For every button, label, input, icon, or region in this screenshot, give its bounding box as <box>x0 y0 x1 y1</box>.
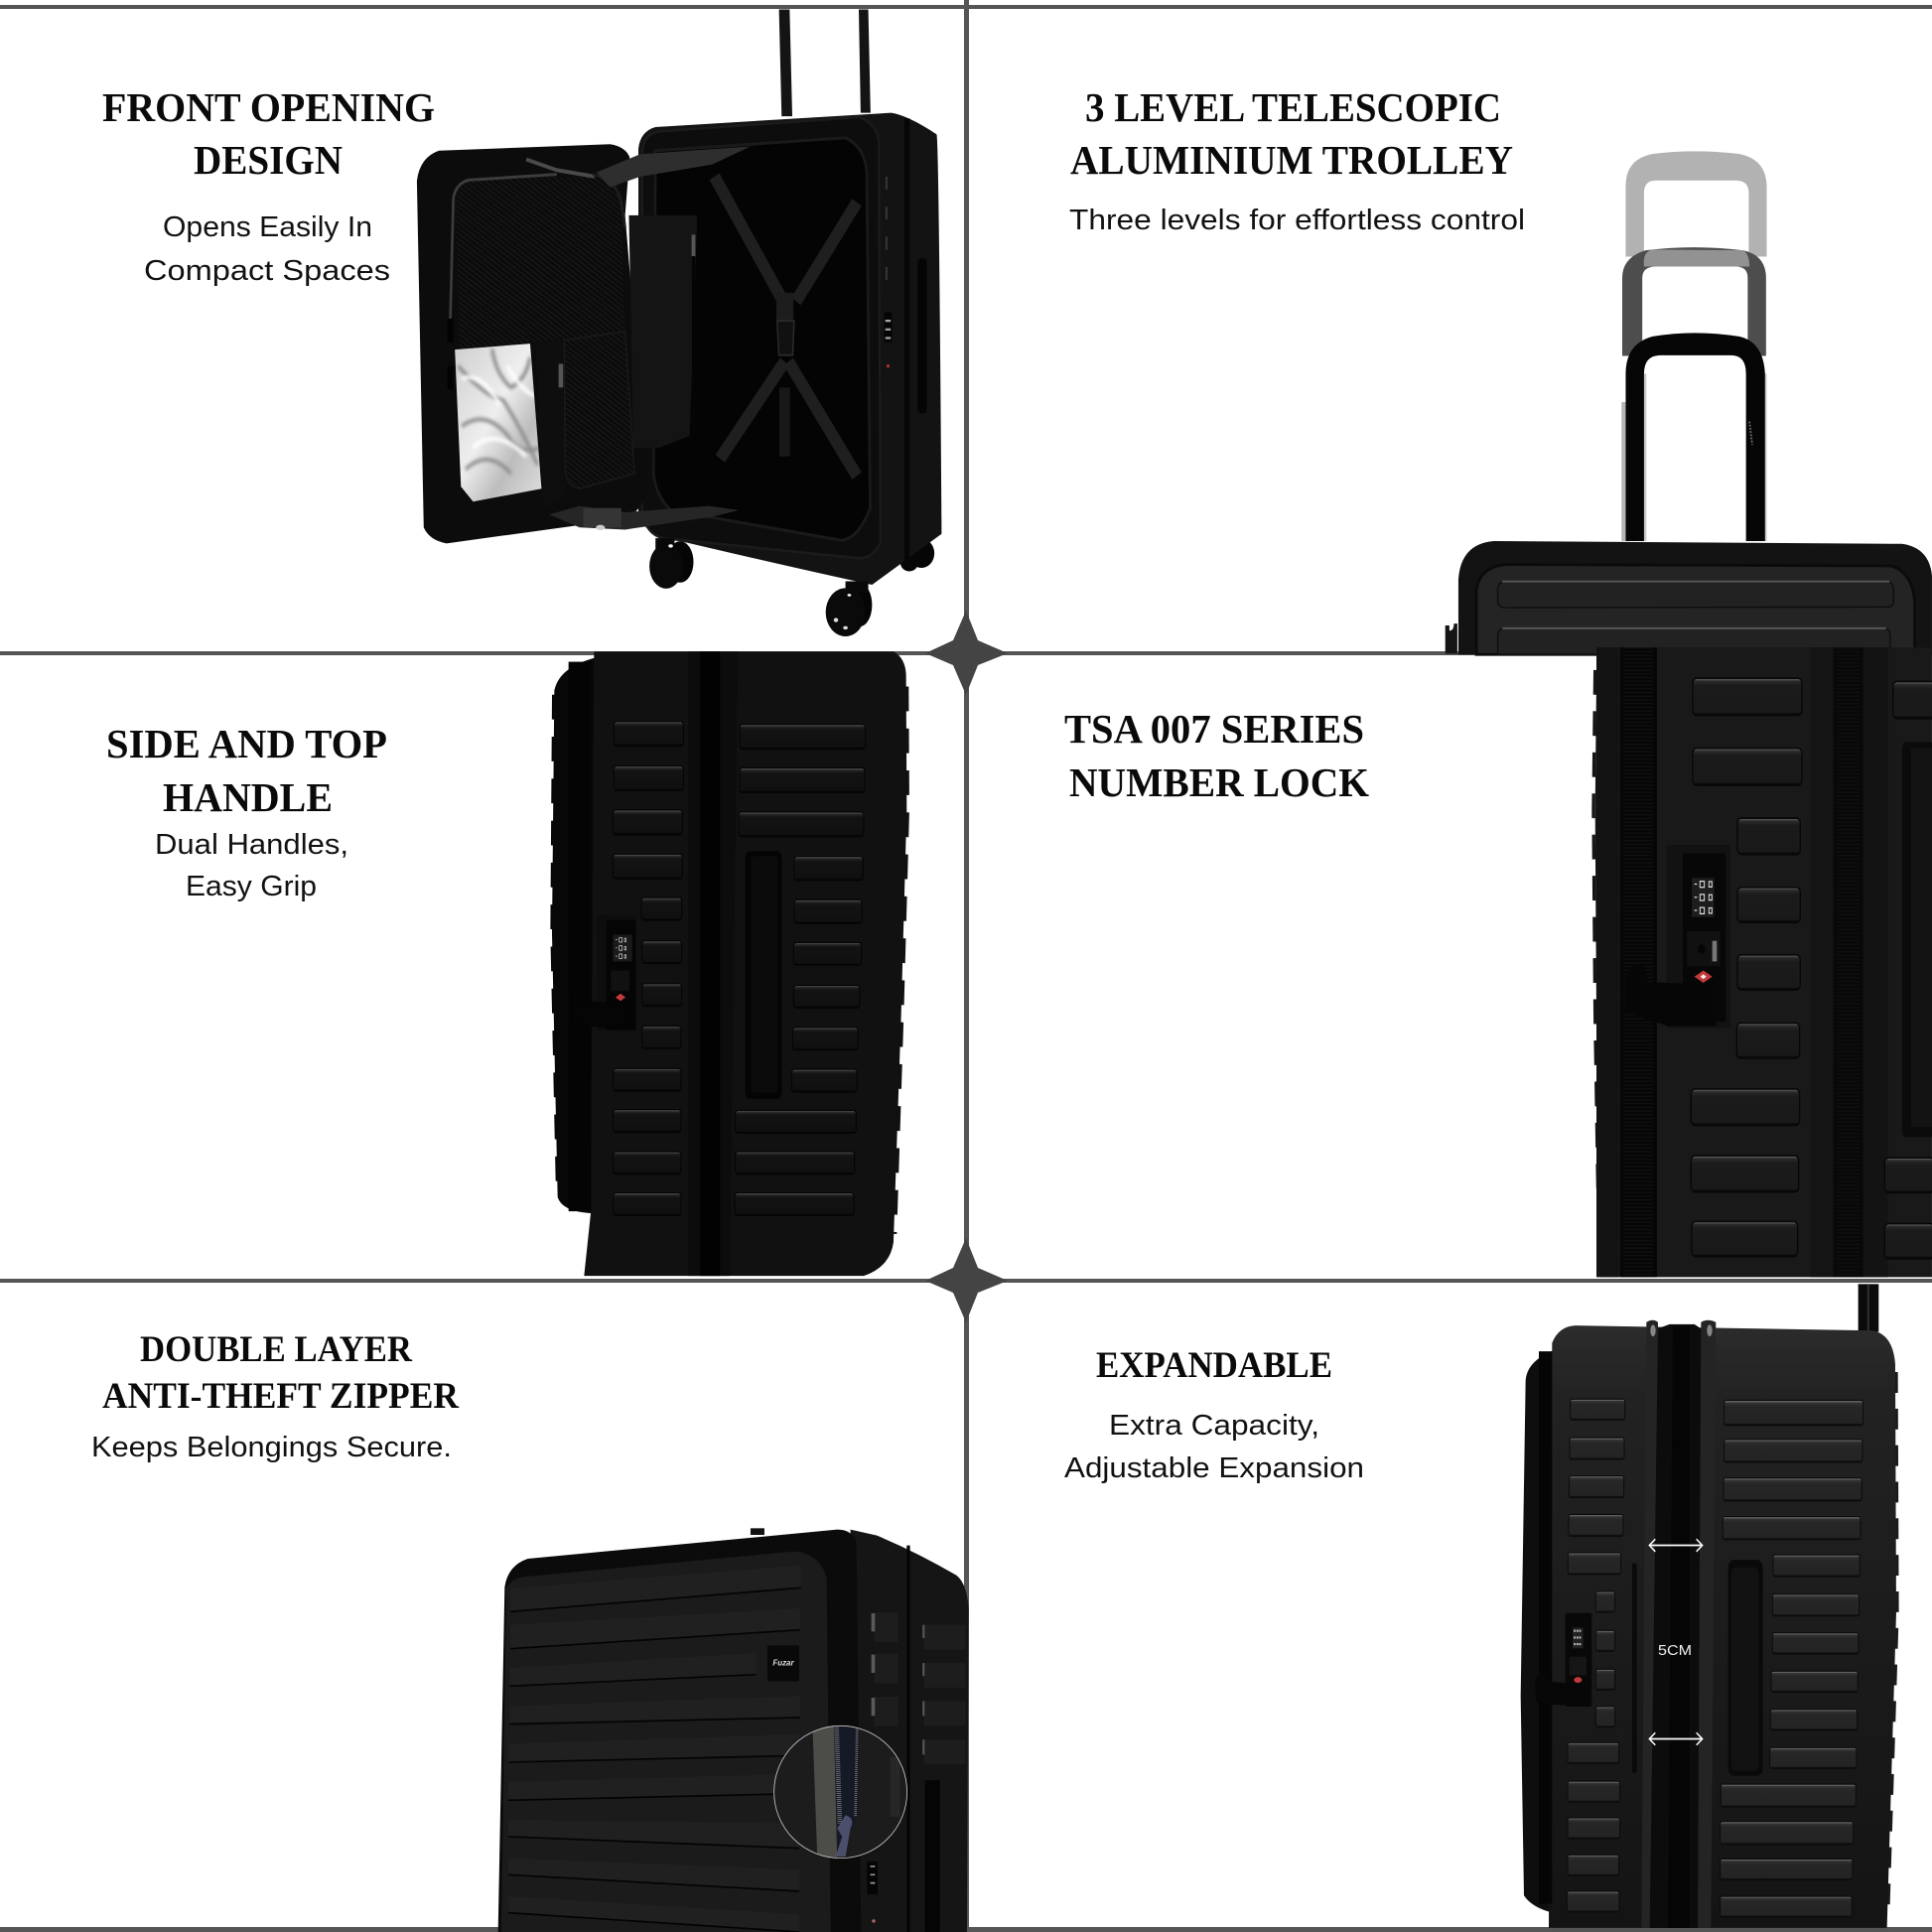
heading: TSA lock: NUMBER LOCK <box>1069 759 1369 805</box>
body text: dual handles <box>155 829 348 902</box>
arrow: bottom expansion <box>1649 1732 1703 1745</box>
body text: dual handles: Dual Handles, <box>155 829 348 861</box>
panel: 3 level telescopic trolley <box>1069 84 1932 654</box>
image: trolley handle and case top <box>1446 151 1932 654</box>
heading: front opening design: DESIGN <box>194 137 343 183</box>
heading: side and top handle: HANDLE <box>163 774 333 820</box>
heading: front opening design: FRONT OPENING <box>102 84 435 130</box>
heading: TSA lock: TSA 007 SERIES <box>1064 706 1364 752</box>
panel: expandable <box>1064 1284 1897 1928</box>
heading: telescopic trolley <box>1070 84 1513 183</box>
heading: anti-theft zipper: DOUBLE LAYER <box>140 1329 413 1370</box>
heading: anti-theft zipper <box>102 1329 460 1417</box>
heading: side and top handle: SIDE AND TOP <box>106 721 387 766</box>
heading: expandable: EXPANDABLE <box>1096 1345 1332 1386</box>
panel: front opening design <box>102 10 941 636</box>
panel: double layer anti-theft zipper <box>91 1329 969 1932</box>
image: suitcase front with zipper magnifier <box>498 1528 969 1932</box>
heading: side and top handle <box>106 721 387 820</box>
heading: TSA lock <box>1064 706 1369 805</box>
image: suitcase front with zipper magnifier: Fuzar <box>772 1658 795 1667</box>
icon: star divider ornament top <box>925 611 1008 695</box>
heading: telescopic trolley: 3 LEVEL TELESCOPIC <box>1085 84 1501 130</box>
body text: opens easily <box>144 211 390 287</box>
panel: side and top handle <box>106 651 907 1276</box>
body text: three levels: Three levels for effortless control <box>1069 205 1525 236</box>
image: side view suitcase <box>552 651 907 1276</box>
body text: extra capacity: Extra Capacity, <box>1109 1410 1319 1442</box>
body text: keeps belongings secure: Keeps Belongings Secure. <box>91 1432 452 1463</box>
body text: extra capacity: Adjustable Expansion <box>1064 1452 1364 1484</box>
heading: front opening design <box>102 84 435 183</box>
image: open suitcase <box>417 10 941 636</box>
body text: opens easily: Compact Spaces <box>144 255 390 287</box>
body text: opens easily: Opens Easily In <box>163 211 372 243</box>
panel: TSA number lock <box>1064 647 1932 1277</box>
image: expanded suitcase side view <box>1521 1284 1897 1928</box>
arrow: top expansion <box>1649 1539 1703 1552</box>
icon: star divider ornament bottom <box>925 1238 1008 1322</box>
heading: anti-theft zipper: ANTI-THEFT ZIPPER <box>102 1376 460 1417</box>
body text: dual handles: Easy Grip <box>186 871 317 902</box>
heading: telescopic trolley: ALUMINIUM TROLLEY <box>1070 137 1513 183</box>
label: 5CM: 5CM <box>1658 1642 1692 1659</box>
body text: extra capacity <box>1064 1410 1364 1484</box>
image: TSA lock close-up <box>1593 647 1932 1277</box>
